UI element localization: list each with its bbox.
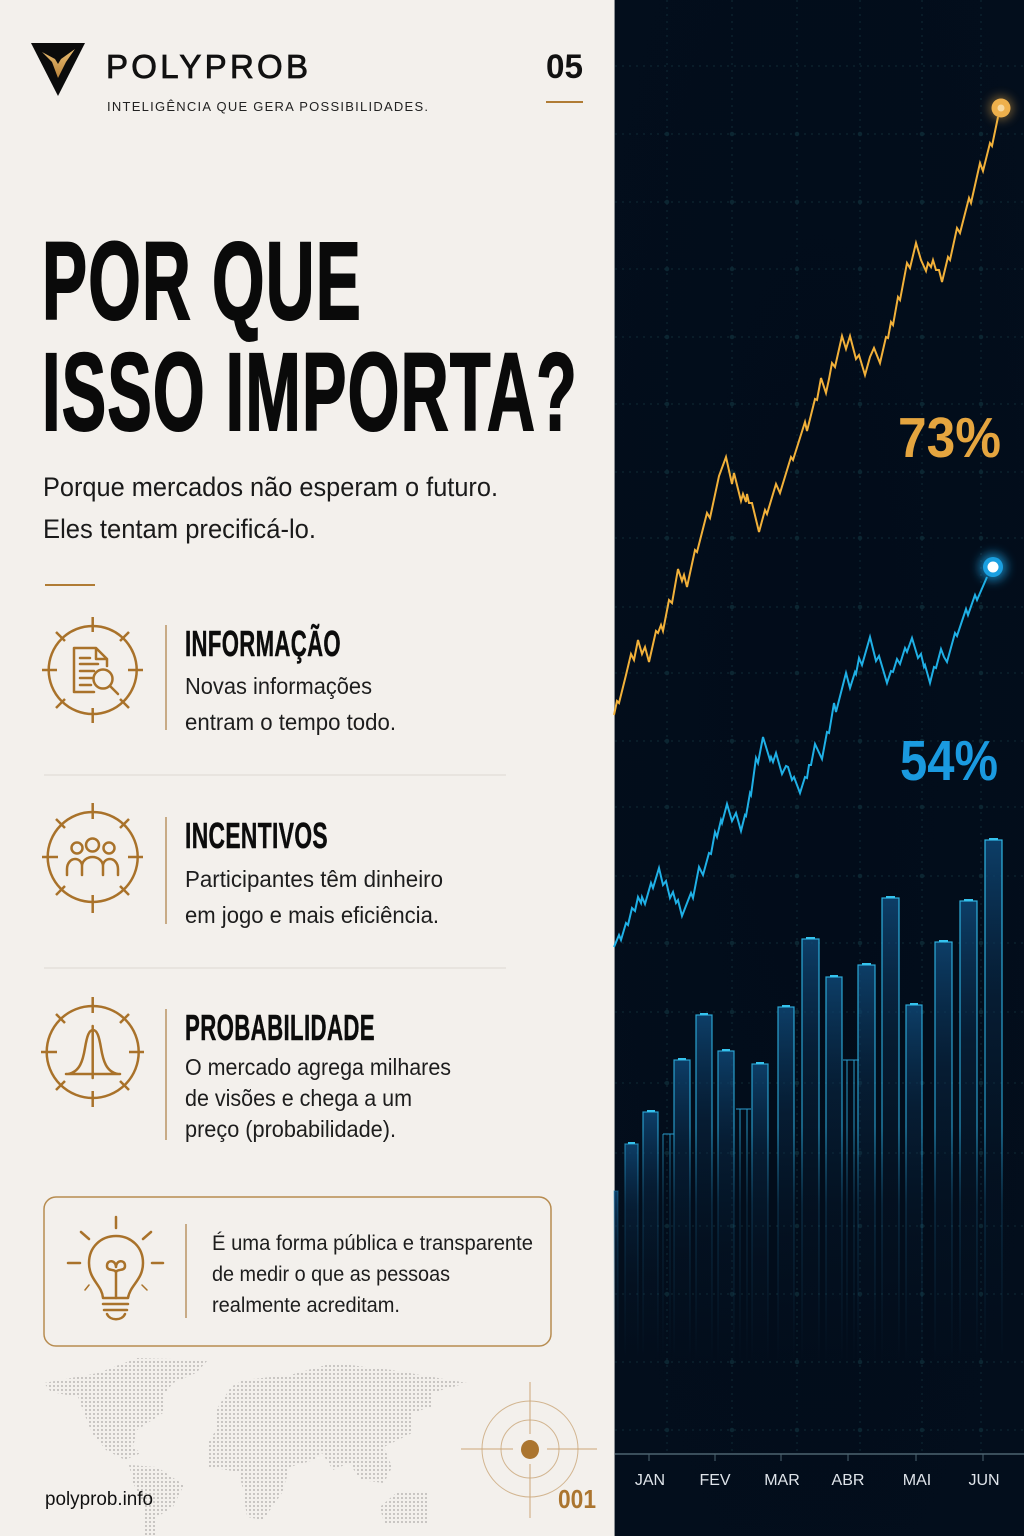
x axis: FEV — [699, 1472, 731, 1489]
value: 73%: 73% — [898, 406, 1001, 470]
gold probability line — [614, 96, 1013, 715]
text — [185, 866, 443, 928]
title: POR QUE — [42, 220, 362, 343]
x axis: JAN — [635, 1472, 665, 1489]
target icon — [461, 1382, 597, 1518]
blue end dot — [979, 553, 1007, 581]
blue probability line — [614, 553, 1007, 947]
text: Novas informações — [185, 673, 372, 699]
subtitle: Porque mercados não esperam o futuro. — [43, 472, 498, 502]
callout text: É uma forma pública e transparente — [212, 1232, 533, 1255]
website: polyprob.info — [45, 1489, 153, 1510]
dotted world map — [44, 1356, 474, 1536]
icon: document search — [42, 617, 143, 723]
text — [185, 1054, 451, 1142]
callout text: realmente acreditam. — [212, 1294, 400, 1317]
logo — [31, 43, 85, 96]
text — [185, 673, 396, 735]
brand name: POLYPROB — [106, 48, 308, 85]
page code: 001 — [558, 1484, 596, 1514]
heading: PROBABILIDADE — [185, 1007, 375, 1048]
heading: INCENTIVOS — [185, 815, 328, 856]
icon: bell curve — [41, 997, 144, 1107]
page number — [546, 48, 583, 102]
subtitle — [43, 472, 498, 544]
title: ISSO IMPORTA? — [42, 331, 578, 454]
text: de visões e chega a um — [185, 1085, 412, 1111]
callout text — [212, 1232, 533, 1317]
item: informação — [42, 617, 396, 735]
text: entram o tempo todo. — [185, 709, 396, 735]
page number: 05 — [546, 48, 583, 86]
left panel background — [0, 0, 614, 1536]
x axis: ABR — [832, 1472, 864, 1489]
gold end dot — [989, 96, 1013, 120]
panel: chart background — [614, 0, 1024, 1536]
item: probabilidade — [41, 997, 451, 1142]
text: Participantes têm dinheiro — [185, 866, 443, 892]
x axis: JUN — [968, 1472, 1000, 1489]
bar chart — [614, 839, 1002, 1362]
text: preço (probabilidade). — [185, 1116, 396, 1142]
text: em jogo e mais eficiência. — [185, 902, 439, 928]
heading: INFORMAÇÃO — [185, 622, 341, 664]
value: 54%: 54% — [900, 729, 998, 793]
x axis: MAR — [764, 1472, 800, 1489]
subtitle: Eles tentam precificá-lo. — [43, 514, 316, 544]
x axis — [615, 1454, 1024, 1489]
tagline: INTELIGÊNCIA QUE GERA POSSIBILIDADES. — [107, 99, 428, 114]
callout text: de medir o que as pessoas — [212, 1263, 450, 1286]
text: O mercado agrega milhares — [185, 1054, 451, 1080]
x axis: MAI — [903, 1472, 931, 1489]
callout — [44, 1197, 551, 1346]
title — [42, 220, 578, 454]
icon: people — [42, 803, 143, 913]
item: incentivos — [42, 803, 443, 928]
icon: light bulb — [68, 1217, 163, 1319]
